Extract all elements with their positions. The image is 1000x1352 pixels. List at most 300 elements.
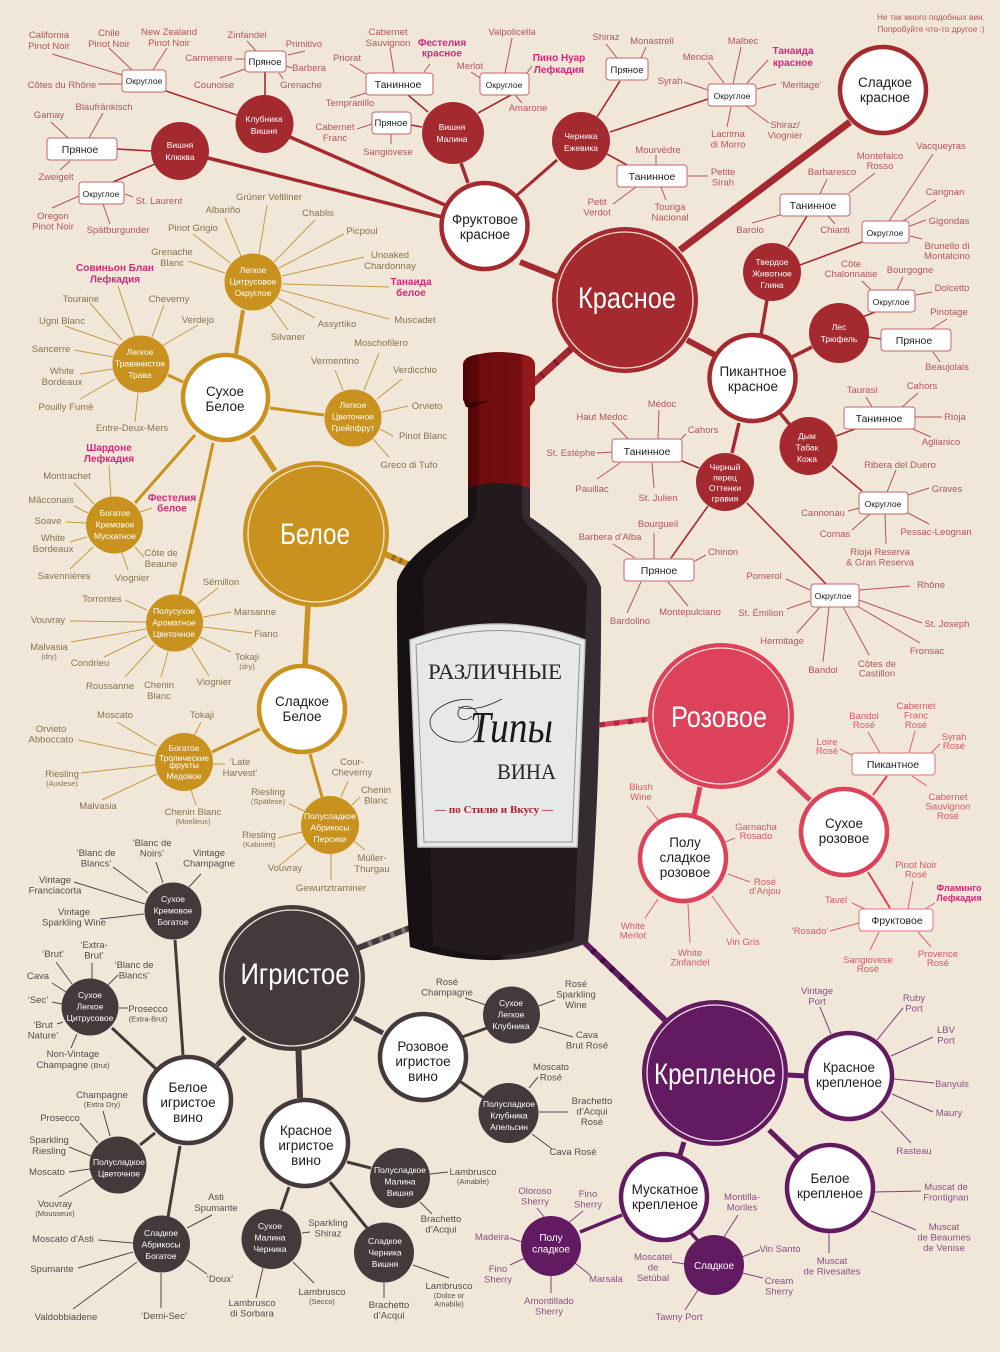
flavour nodes: red: Черника [564, 131, 598, 141]
style box labels: red: Округлое [865, 499, 902, 509]
style box labels: red: Танинное [790, 200, 837, 212]
red wine labels: Lacrima [711, 129, 745, 140]
flavour nodes: white: Цветочное [332, 412, 374, 422]
red wine labels: Zinfandel [227, 30, 267, 41]
node: muscat fortified: Мускатное [632, 1182, 698, 1197]
flavour nodes: red: Клюква [165, 152, 195, 162]
red wine labels: Pomerol [746, 571, 782, 582]
flavour nodes: sparkling: Сухое [499, 998, 523, 1008]
white wine labels: Bordeaux [33, 544, 74, 555]
fortified wine labels: Marsala [589, 1274, 624, 1285]
white wine labels: Chenin [144, 680, 174, 691]
featured white wines: Совиньон Блан [76, 263, 154, 274]
style box labels: red: Пряное [62, 144, 98, 156]
white connectors [135, 310, 412, 797]
flavour nodes: red: Вишня [439, 122, 465, 132]
flavour nodes: white: Кремовое [96, 520, 135, 530]
note: top right [877, 12, 985, 34]
flavour nodes: white: Мускатное [94, 531, 136, 541]
white wine labels: Fiano [254, 629, 278, 640]
white main node: Белое [280, 518, 350, 551]
sparkling wine labels: (Extra-Brut) [129, 1014, 168, 1024]
white wine labels: Marsanne [234, 607, 276, 618]
node: white fortified: крепленое [797, 1186, 863, 1201]
white wine labels: Picpoul [346, 226, 378, 237]
sparkling wine labels: Lambrusco [450, 1167, 496, 1178]
rosé wine labels: Syrah [942, 732, 966, 743]
white wine labels: Muscadet [394, 315, 436, 326]
rosé wine labels: Loire [816, 737, 838, 748]
white wine labels: Abboccato [29, 734, 73, 746]
white wine labels: Malvasia [79, 801, 117, 812]
fortified wine labels: Muscat [929, 1222, 959, 1233]
flavour nodes: sparkling: Черника [253, 1244, 287, 1254]
red wine labels: & Gran Reserva [846, 558, 915, 568]
flavour nodes: sparkling: Легкое [498, 1010, 525, 1020]
red wine labels: Rosso [867, 161, 893, 172]
red wine labels: Monastrell [630, 36, 674, 47]
red wine labels: Chalonnaise [825, 269, 877, 280]
featured rosé wine: Фламинго [937, 883, 981, 893]
note: top right: Попробуйте что-то другое :) [877, 24, 985, 34]
white wine labels: Pinot Blanc [399, 431, 447, 442]
style boxes: rosé [852, 753, 935, 931]
flavour nodes: sparkling: Абрикосы [142, 1240, 180, 1250]
flavour nodes: fortified [521, 1216, 744, 1295]
red wine labels: Amarone [509, 103, 547, 114]
red wine labels: Chianti [820, 225, 850, 236]
sparkling wine labels: Brut’ [84, 950, 104, 962]
featured red wines: Танаида [772, 46, 814, 57]
red wine labels: Ribera del Duero [864, 460, 936, 471]
flavour nodes: sparkling: Кремовое [154, 906, 193, 916]
flavour nodes: fortified: Полу [539, 1233, 563, 1244]
sparkling wine labels: ‘Sec’ [28, 995, 48, 1006]
red wine labels: Tempranillo [326, 98, 374, 109]
fortified wine labels: de [648, 1262, 658, 1274]
white wine labels: Orvieto [36, 724, 66, 735]
node: semi-sweet rosé [640, 815, 726, 901]
white spoke lines [65, 205, 408, 880]
flavour nodes: sparkling: Вишня [372, 1259, 399, 1269]
flavour nodes: white: Цитрусовое [230, 276, 277, 286]
fortified wine labels: Vin Santo [759, 1244, 801, 1255]
fortified wine labels: Muscat [817, 1256, 847, 1267]
node: rosé sparkling [380, 1014, 466, 1100]
white wine labels: White [41, 533, 65, 544]
sparkling wine labels: Moscato d’Asti [32, 1234, 94, 1245]
fortified wine labels: Cream [765, 1276, 793, 1287]
fortified wine labels: Port [937, 1036, 955, 1046]
sparkling wine labels: Rosé [436, 977, 458, 988]
label subtitle: — по Стилю и Вкусу — [434, 805, 554, 816]
white wine labels: Beaune [145, 559, 177, 570]
red wine labels: Gigondas [929, 216, 970, 227]
fortified wine labels: Ruby [903, 993, 925, 1004]
sparkling wine labels: Wine [565, 1000, 587, 1011]
sparkling wine labels: Rosé [540, 1072, 562, 1084]
red wine labels: Syrah [658, 76, 682, 87]
rosé wine labels: Provence [918, 949, 958, 960]
red wine labels: Hermitage [760, 636, 804, 647]
style box labels: red: Округлое [714, 91, 751, 101]
rosé wine labels: Rosé [857, 964, 879, 975]
label word: ВИНА [497, 759, 556, 784]
flavour nodes: white: Медовое [166, 771, 202, 781]
white wine labels: Vouvray [31, 615, 65, 626]
flavour nodes: red: Животное [752, 268, 792, 278]
flavour nodes: sparkling: Цветочное [98, 1168, 140, 1178]
sparkling wine labels: d’Acqui [373, 1310, 405, 1322]
flavour nodes: sparkling: Богатое [145, 1251, 177, 1261]
red wine labels: Merlot [457, 61, 484, 72]
sparkling wine labels: Blancs’ [119, 970, 149, 982]
rosé wine labels: Cabernet [896, 701, 936, 712]
style box labels: red: Пряное [611, 65, 643, 76]
red wine labels: Brunello di [925, 241, 969, 252]
fortified wine labels: Rasteau [896, 1146, 932, 1157]
style box labels: red: Округлое [873, 297, 910, 307]
red wine labels: Priorat [333, 53, 361, 64]
red wine labels: Fronsac [910, 646, 944, 657]
red wine labels: Médoc [648, 399, 677, 410]
white wine labels: Pouilly Fumè [39, 402, 93, 413]
rosé wine labels: Rosé [927, 958, 949, 969]
flavour nodes: red: Трюфель [821, 334, 858, 344]
fortified spoke lines [510, 1007, 934, 1310]
white wine labels: Chenin [361, 785, 391, 796]
sparkling wine labels: Moscato [533, 1062, 569, 1073]
sparkling wine labels: (Secco) [309, 1297, 335, 1306]
red wine labels: Primitivo [286, 39, 322, 50]
white wine labels: Vermentino [311, 356, 359, 367]
rosé wine labels: Rosé [905, 720, 927, 731]
white wine labels: Ugni Blanc [39, 316, 85, 327]
flavour nodes: red: перец [713, 472, 737, 482]
white wine labels: (dry) [41, 652, 57, 661]
note: top right: Не так много подобных вин. [877, 12, 985, 22]
red wine labels: Nacional [652, 212, 688, 224]
style boxes: red [47, 51, 951, 607]
white wine labels: Malvasia [30, 642, 68, 653]
rosé main node: Розовое [671, 701, 767, 734]
featured red wines: Пино Нуар [533, 53, 585, 64]
node: rosé sparkling: вино [408, 1069, 438, 1084]
sparkling wine labels: d’Acqui [425, 1224, 457, 1236]
white wine labels: Blanc [364, 796, 388, 806]
style box labels: red: Танинное [375, 79, 422, 91]
red wine labels: Beaujolais [925, 362, 969, 373]
flavour nodes: red: Ежевика [564, 143, 598, 153]
style box labels: red: Округлое [83, 189, 120, 199]
sparkling wine labels: di Sorbara [230, 1308, 275, 1320]
white wine labels: Cheverny [332, 768, 373, 778]
white wine labels: Thurgau [354, 864, 390, 875]
rosé spoke lines [645, 731, 940, 950]
style box labels: red: Танинное [856, 413, 903, 425]
fortified wine labels: Sherry [535, 1306, 563, 1318]
sparkling wine labels: Spumante [30, 1264, 74, 1275]
rosé wine labels: Merlot [620, 930, 647, 942]
flavour nodes: red: Оттенки [709, 483, 741, 493]
node: spicy red: красное [728, 379, 778, 394]
red wine labels: Castillon [859, 668, 895, 680]
sparkling wine labels: Champagne [183, 858, 235, 870]
flavour nodes: red: Табак [796, 442, 819, 452]
white wine labels: Blanc [147, 691, 171, 702]
red wine labels: Montepulciano [659, 607, 721, 618]
rosé wine labels: Blush [629, 782, 653, 793]
node: dry rosé: Сухое [825, 816, 863, 831]
sparkling wine labels: Brachetto [421, 1214, 461, 1225]
fortified wine labels: Port [905, 1004, 923, 1014]
rosé connectors [590, 719, 890, 908]
red wine labels: Spätburgunder [87, 225, 149, 236]
sparkling wine labels: Asti [208, 1192, 224, 1203]
flavour nodes: white: Легкое [340, 400, 366, 410]
featured white wines [76, 263, 432, 514]
fortified wine labels: Sherry [521, 1196, 549, 1208]
flavour nodes: sparkling: Сухое [161, 894, 185, 904]
flavour nodes: sparkling: Богатое [157, 917, 189, 927]
red wine labels: St. Émilion [738, 608, 784, 619]
sparkling wine labels: Cava Rosé [550, 1147, 596, 1158]
red wine labels: Pauillac [575, 484, 609, 495]
sparkling wine labels: Rosé [581, 1117, 603, 1128]
white wine labels: Pinot Grigio [168, 223, 218, 234]
red wine labels: Bourgogne [887, 265, 933, 276]
node: dry rosé: розовое [819, 831, 869, 846]
flavour nodes: red: Твердое [756, 257, 788, 267]
white wine labels: Assyrtiko [318, 319, 356, 330]
label script word: Типы [470, 703, 553, 752]
red wine labels: Bourgueil [638, 519, 678, 530]
featured rosé wine: Лефкадия [936, 893, 982, 903]
panel: red wines [28, 27, 972, 680]
white wine labels: Mâcconais [28, 495, 74, 506]
red wine labels: Dolcetto [935, 283, 969, 294]
fortified wine labels: Moscatel [634, 1252, 672, 1263]
featured white wines: белое [396, 287, 426, 299]
white wine labels: Cheverny [149, 294, 190, 305]
sparkling wine labels: Blancs’ [81, 858, 111, 870]
white wine labels: Moscato [97, 710, 133, 721]
sparkling wine labels: Vintage [58, 907, 90, 918]
flavour nodes: white: Цветочное [153, 629, 195, 639]
rosé wine labels: Rosé [905, 870, 927, 880]
fortified wine labels: Vintage [801, 986, 833, 997]
flavour nodes: white: Ароматное [152, 618, 196, 628]
sparkling wine labels: Shiraz [315, 1228, 342, 1240]
node: red fortified [806, 1033, 892, 1119]
style box labels: red: Округлое [867, 228, 904, 238]
white wine labels: Grenache [151, 247, 193, 258]
red wine labels: Taurasi [847, 385, 877, 396]
flavour nodes: sparkling: Черника [368, 1248, 402, 1258]
red wine labels: Oregon [37, 211, 69, 222]
fortified wine labels: Maury [936, 1108, 962, 1119]
sparkling wine labels: Cava [576, 1030, 598, 1041]
panel: white wines [28, 192, 447, 894]
flavour nodes: white: Легкое [240, 265, 266, 275]
style boxes: rosé: Фруктовое [871, 915, 923, 927]
white wine labels: Chablis [302, 208, 334, 219]
white wine labels: Orvieto [412, 401, 442, 412]
red wine labels [28, 27, 972, 680]
flavour nodes: red: Вишня [251, 126, 278, 136]
node: red fortified: крепленое [816, 1075, 882, 1090]
node: dry rosé [801, 789, 887, 875]
node: fruity red [442, 183, 528, 269]
flavour nodes: sparkling [62, 882, 540, 1282]
red wine labels: Pinotage [930, 307, 968, 318]
fortified wine labels: Sherry [765, 1286, 793, 1298]
sparkling wine labels: Champagne (Brut) [36, 1060, 110, 1071]
white wine labels: Tokaji [235, 652, 259, 663]
flavour nodes: sparkling: Клубника [492, 1021, 530, 1031]
red wine labels: Franc [323, 133, 347, 144]
red wine labels: Pinot Noir [88, 39, 130, 50]
bottle [397, 352, 601, 960]
red wine labels: St. Estèphe [546, 448, 596, 459]
fortified wine labels: Sherry [574, 1200, 602, 1210]
red wine labels: Cannonau [801, 508, 845, 519]
bottle glass [397, 480, 601, 960]
sparkling wine labels: Prosecco [128, 1004, 168, 1015]
flavour nodes: sparkling: Малина [254, 1232, 286, 1242]
rosé main node [648, 643, 794, 789]
flavour nodes: white: Полусладкое [304, 811, 356, 821]
white wine labels: Moschofilero [354, 338, 408, 349]
fortified wine labels: Tawny Port [656, 1312, 703, 1323]
white wine labels: (dry) [239, 662, 255, 671]
red wine labels: New Zealand [141, 27, 197, 38]
sparkling wine labels: Non-Vintage [47, 1049, 99, 1060]
red wine labels: Chinon [708, 547, 738, 558]
panel: sparkling wines [27, 838, 612, 1323]
rosé wine labels: d’Anjou [749, 886, 781, 897]
rosé wine labels: Sangiovese [843, 955, 893, 966]
red wine labels: Touriga [654, 202, 686, 213]
node: red sparkling: игристое [278, 1138, 334, 1153]
rosé wine labels: Bandol [849, 711, 879, 722]
node: dry white [183, 355, 268, 440]
white wine labels: (Auslese) [46, 779, 78, 788]
fortified wine labels: Montilla- [724, 1192, 760, 1203]
red wine labels: Cabernet [368, 27, 408, 38]
flavour nodes: fortified: Сладкое [694, 1261, 734, 1272]
sparkling wine labels: Lambrusco [426, 1281, 472, 1292]
red wine labels: Barbaresco [808, 167, 856, 178]
white wine labels: Montrachet [43, 471, 91, 482]
node: sweet red [840, 47, 926, 133]
white wine labels: Verdejo [182, 315, 214, 326]
red wine labels: Valpolicella [488, 27, 536, 38]
red wine labels: Graves [932, 484, 963, 495]
flavour nodes: white: Абрикосы [311, 822, 349, 832]
flavour nodes: white: фрукты [169, 760, 199, 770]
red wine labels: Barolo [736, 225, 764, 236]
sparkling wine labels: Prosecco [40, 1113, 80, 1124]
label script flourish [430, 699, 502, 742]
node: fruity red: Фруктовое [452, 212, 518, 227]
flavour nodes: sparkling: Полусладкое [93, 1157, 145, 1167]
rosé wine labels: Garnacha [735, 822, 777, 833]
red wine labels: St. Joseph [925, 619, 969, 630]
white wine labels: Verdicchio [393, 365, 437, 376]
sparkling wine labels: Nature’ [28, 1030, 58, 1042]
white wine labels: Gewurtztraminer [296, 883, 366, 894]
style box labels: red: Округлое [815, 591, 852, 601]
flavour nodes: white: Персики [313, 834, 347, 844]
red wine labels: Malbec [728, 36, 759, 47]
white wine labels: Viognier [115, 573, 149, 584]
white wine labels: Roussanne [86, 681, 134, 692]
white wine labels: Unoaked [371, 250, 409, 261]
sparkling wine labels: Cava [27, 971, 50, 982]
featured red wines: красное [422, 48, 462, 60]
flavour nodes: red: Лес [832, 322, 846, 332]
flavour nodes: sparkling: Сухое [78, 990, 102, 1000]
flavour nodes: sparkling: Малина [384, 1176, 416, 1186]
node: sweet red: красное [860, 90, 910, 105]
red wine labels: Carignan [926, 187, 964, 198]
fortified wine labels: Moriles [727, 1202, 758, 1214]
red wine labels: Bardolino [610, 616, 650, 627]
sparkling wine labels: Spumante [194, 1203, 238, 1214]
style box labels: red: Пряное [641, 565, 677, 577]
node: dry white: Сухое [206, 384, 244, 399]
red wine labels: Pessac-Leognan [900, 527, 972, 538]
fortified main node [642, 1000, 788, 1146]
white wine labels: Greco di Tufo [380, 460, 438, 471]
red wine labels: Aglianico [922, 437, 960, 448]
node: spicy red: Пикантное [719, 364, 787, 379]
red wine labels: Sauvignon [366, 38, 410, 49]
white wine labels: Blanc [160, 258, 184, 269]
fortified wine labels: Banyuls [935, 1079, 969, 1090]
red wine labels: Blaufränkisch [75, 102, 133, 113]
bottle capsule [463, 352, 535, 488]
featured white wines: белое [157, 502, 187, 514]
sparkling wine labels: Champagne [421, 988, 473, 998]
flavour nodes: white: Богатое [99, 508, 131, 518]
sparkling spoke lines [52, 862, 573, 1309]
white wine labels: Bordeaux [42, 377, 83, 388]
red wine labels: Côtes du Rhône [28, 80, 96, 91]
flavour nodes: white: Трава [128, 370, 152, 380]
red wine labels: Rhône [917, 580, 945, 591]
style box labels: red: Танинное [624, 446, 671, 458]
white wine labels: Entre-Deux-Mers [96, 423, 168, 434]
red wine labels: Shiraz/ [770, 120, 800, 131]
style boxes: rosé: Пикантное [867, 759, 919, 771]
node: white fortified [787, 1145, 873, 1231]
sparkling main node: Игристое [240, 958, 350, 991]
white wine labels: ‘Late [230, 757, 250, 768]
bottle label [410, 624, 585, 847]
sparkling wine labels: ‘Brut [33, 1020, 53, 1031]
sparkling wine labels: Riesling [32, 1146, 66, 1157]
red wine labels: Viognier [768, 130, 802, 142]
rosé wine labels: Rosé [937, 811, 959, 822]
fortified wine labels: Fino [579, 1189, 597, 1200]
white wine labels: (Kabinett) [243, 840, 276, 849]
featured white wines: Лефкадия [84, 453, 134, 465]
style box labels: red: Пряное [896, 335, 932, 347]
featured rosé wine [936, 883, 982, 903]
sparkling wine labels: Rosé [565, 979, 587, 990]
